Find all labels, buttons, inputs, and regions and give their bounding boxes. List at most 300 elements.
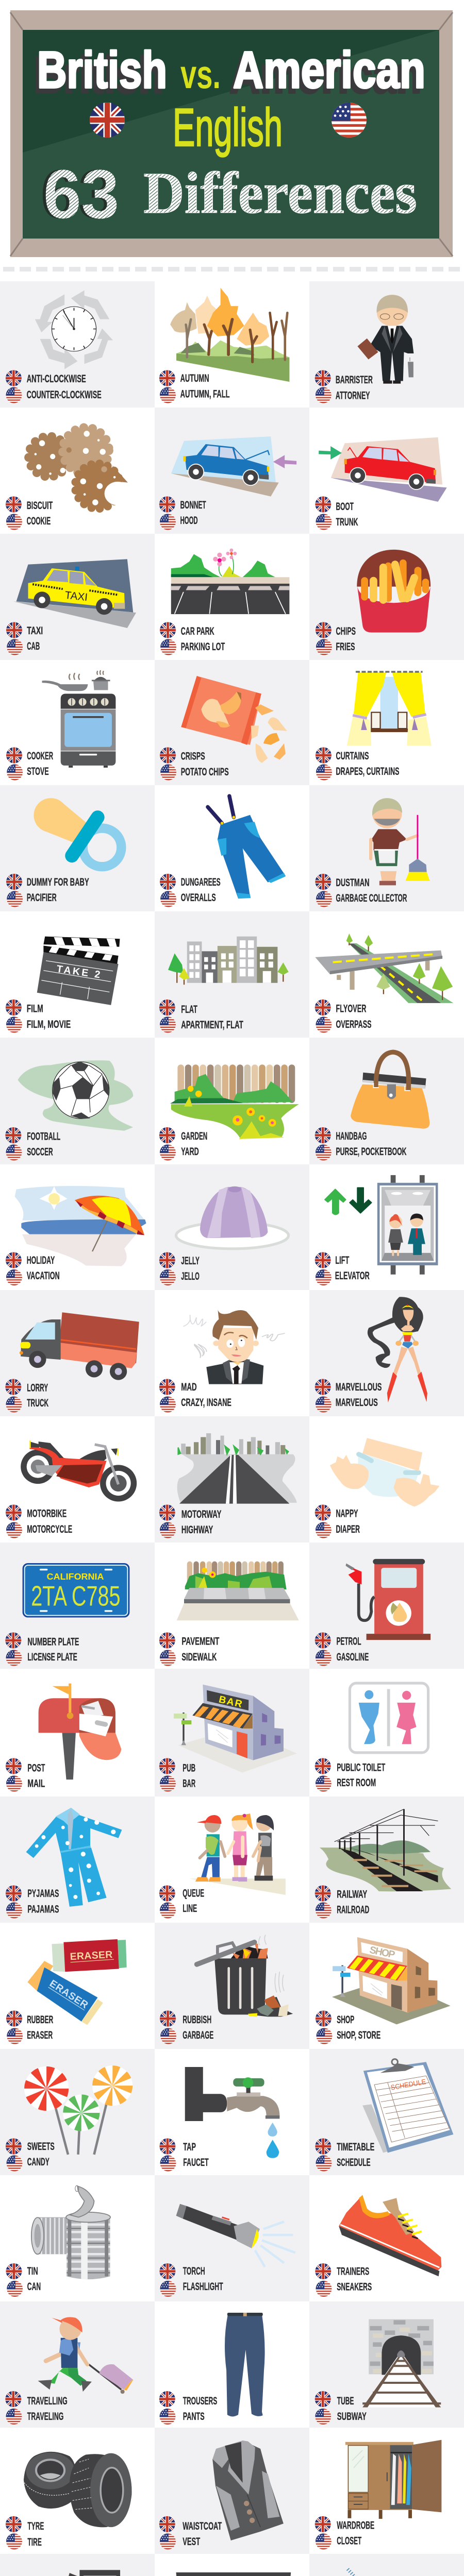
illustration: bag of crisps: [181, 676, 287, 763]
British term: BOOT: [336, 501, 354, 513]
panel: boot / trunk: [309, 408, 464, 534]
subtitle: 63: 63: [40, 156, 116, 233]
American term: REST ROOM: [337, 1777, 376, 1789]
American term: GARBAGE COLLECTOR: [336, 892, 407, 904]
British term: FOOTBALL: [27, 1131, 60, 1143]
panel: film / film, movie: [0, 911, 155, 1038]
UK flag: [159, 1504, 175, 1521]
panel: car park / parking lot: [155, 534, 309, 660]
panel: dungarees / overalls: [155, 785, 309, 911]
UK flag: [159, 2263, 175, 2279]
title: British vs. American: American: [229, 46, 422, 104]
US flag: [316, 639, 332, 655]
British term: CAR PARK: [181, 625, 214, 637]
US flag: [6, 1522, 22, 1538]
US flag: [160, 2534, 176, 2549]
UK flag: [6, 622, 22, 638]
panel: bonnet / hood: [155, 408, 309, 534]
panel: public toilet / rest room: [309, 1669, 464, 1797]
panel: autumn / autumn, fall: [155, 281, 309, 408]
illustration: yellow taxi: TAXI: [64, 589, 88, 603]
title: British vs. American: vs.: [180, 52, 221, 97]
illustration: lift with people and arrows: [325, 1175, 438, 1275]
UK flag: [315, 1504, 331, 1521]
American term: FLASHLIGHT: [183, 2281, 223, 2293]
US flag: [316, 514, 332, 530]
US flag: [316, 1396, 332, 1413]
American term: COUNTER-CLOCKWISE: [27, 389, 102, 401]
US flag: [7, 765, 23, 780]
panel: pyjamas / pajamas: [0, 1797, 155, 1923]
US flag: [316, 2156, 332, 2171]
illustration: football on grass patch: [18, 1060, 133, 1131]
American term: OVERPASS: [336, 1019, 371, 1030]
illustration: baby in nappy: [330, 1438, 439, 1506]
illustration: tyres: [24, 2452, 132, 2527]
US flag: [160, 514, 176, 530]
UK flag: [315, 2516, 331, 2532]
US flag: [6, 514, 22, 530]
British term: TIN: [27, 2265, 38, 2277]
UK flag: [159, 2138, 175, 2155]
American term: TIRE: [27, 2536, 42, 2548]
American term: CAB: [27, 640, 40, 652]
British term: PETROL: [337, 1635, 361, 1647]
American term: OVERALLS: [181, 892, 216, 904]
American term: CAN: [27, 2281, 41, 2293]
American term: PARKING LOT: [181, 641, 225, 653]
US flag: [316, 1017, 332, 1032]
US flag: [316, 387, 332, 403]
illustration: clock with circular arrows: [35, 291, 113, 369]
British term: MOTORWAY: [181, 1509, 221, 1520]
British term: TUBE: [337, 2395, 354, 2407]
UK flag: [315, 2138, 331, 2155]
panel: lift / elevator: [309, 1164, 464, 1290]
UK flag: [6, 1504, 22, 1521]
US flag: [160, 2028, 176, 2044]
American term: GARBAGE: [183, 2029, 213, 2041]
US flag: [316, 1775, 332, 1792]
British term: DUNGAREES: [181, 876, 221, 888]
British term: TAP: [183, 2141, 196, 2153]
American term: MAIL: [27, 1777, 45, 1790]
American term: DRAPES, CURTAINS: [336, 766, 399, 777]
panel: whisky / whisky/whiskey: [0, 2554, 155, 2576]
UK flag: [6, 1252, 22, 1268]
subtitle: 63: 63: [43, 156, 119, 233]
title: British vs. American: British: [34, 46, 163, 104]
UK flag: [159, 1252, 175, 1268]
UK flag: [5, 2391, 21, 2407]
British term: QUEUE: [183, 1887, 204, 1899]
title: British vs. American: American: [233, 41, 425, 99]
panel: trousers / pants: [155, 2301, 309, 2428]
American term: AUTUMN, FALL: [180, 388, 230, 400]
UK flag: [160, 747, 176, 764]
panel: zip / zipper: [309, 2554, 464, 2576]
UK flag: [315, 1127, 331, 1143]
UK flag: [159, 370, 175, 386]
British term: BISCUIT: [27, 500, 53, 512]
illustration: garden with fence and flowers: [170, 1064, 299, 1139]
illustration: whisky bottle and label: [37, 2570, 120, 2576]
American term: ERASER: [27, 2029, 53, 2041]
illustration: tunnel and tracks: [362, 2319, 441, 2408]
British term: TRAINERS: [337, 2266, 369, 2277]
UK flag: [6, 747, 22, 764]
US flag: [7, 891, 23, 907]
panel: railway / railroad: [309, 1797, 464, 1923]
British term: POST: [27, 1762, 45, 1774]
US flag: [6, 1775, 22, 1792]
UK flag: [315, 874, 331, 890]
panel: jelly / jello: [155, 1164, 309, 1290]
illustration: orange sneaker: [339, 2195, 441, 2276]
American term: PAJAMAS: [27, 1903, 59, 1915]
US flag: [316, 2281, 332, 2297]
illustration: beach with umbrella: [15, 1186, 146, 1266]
British term: LORRY: [27, 1382, 48, 1394]
panel: motorway / highway: [155, 1416, 309, 1543]
illustration: jelly on a plate: [176, 1187, 289, 1249]
US flag: [160, 1145, 176, 1160]
British term: AUTUMN: [180, 372, 209, 384]
British term: PUBLIC TOILET: [337, 1762, 385, 1773]
British term: RUBBISH: [183, 2014, 211, 2026]
British term: DUSTMAN: [336, 877, 369, 889]
UK flag: [5, 1379, 21, 1395]
panel: flyover / overpass: [309, 911, 464, 1038]
US flag: [6, 1017, 22, 1032]
US flag: [316, 1650, 332, 1666]
American term: YARD: [181, 1146, 199, 1158]
British term: TIMETABLE: [337, 2141, 374, 2153]
illustration: schedule clipboard: SCHEDULE: [390, 2078, 426, 2092]
illustration: cooker with pots: [42, 670, 115, 768]
panel: crisps / potato chips: [155, 660, 309, 785]
panel: biscuit / cookie: [0, 408, 155, 534]
American term: SUBWAY: [337, 2411, 367, 2422]
US flag: [332, 103, 367, 138]
US flag: [317, 2028, 332, 2044]
UK flag: [159, 999, 175, 1015]
panel: trainers / sneakers: [309, 2175, 464, 2301]
panel: number plate / license plate: [0, 1543, 155, 1669]
illustration: tin cans: [31, 2185, 110, 2279]
British term: MOTORBIKE: [27, 1507, 67, 1519]
British term: TRAVELLING: [27, 2395, 68, 2407]
US flag: [6, 1902, 22, 1919]
US flag: [6, 1396, 22, 1413]
American term: SNEAKERS: [337, 2281, 372, 2293]
UK flag: [315, 999, 331, 1015]
UK flag: [159, 1758, 175, 1774]
UK flag: [160, 874, 176, 890]
arrow pointing at the boot: [319, 446, 342, 460]
illustration: two erasers: [27, 1939, 127, 2025]
panel: dummy for baby / pacifier: [0, 785, 155, 911]
British term: BARRISTER: [336, 374, 373, 386]
subtitle: English: English: [173, 98, 283, 158]
British term: RUBBER: [27, 2014, 53, 2026]
illustration: film clapperboard: [37, 937, 120, 1005]
British term: BONNET: [180, 499, 206, 511]
UK flag: [6, 999, 22, 1015]
American term: FILM, MOVIE: [27, 1019, 71, 1030]
illustration: bar building: [174, 1685, 297, 1773]
US flag: [316, 2534, 332, 2549]
US flag: [316, 1522, 332, 1538]
UK flag: [315, 1886, 331, 1901]
American term: VEST: [183, 2536, 200, 2548]
illustration: rubbish bin: [197, 1935, 293, 2016]
UK flag: [6, 2516, 22, 2532]
illustration: toilet sign: [350, 1683, 428, 1753]
illustration: zip: [329, 2569, 443, 2576]
illustration: railway: [320, 1809, 451, 1891]
panel: post / mail: [0, 1669, 155, 1797]
UK flag: [159, 1127, 175, 1143]
American term: JELLO: [181, 1270, 200, 1282]
British term: TROUSERS: [183, 2395, 217, 2407]
British term: LIFT: [335, 1255, 349, 1266]
panel: flat / apartment, flat: [155, 911, 309, 1038]
US flag: [7, 2028, 23, 2044]
panel: holiday / vacation: [0, 1164, 155, 1290]
UK flag: [6, 2010, 22, 2027]
British term: FLAT: [181, 1004, 197, 1015]
panel: rubber / eraser: [0, 1923, 155, 2049]
illustration: window with yellow curtains: [347, 672, 432, 745]
US flag: [160, 2281, 176, 2297]
UK flag: [5, 1127, 21, 1143]
illustration: three children queuing: [189, 1814, 286, 1895]
British term: DUMMY FOR BABY: [27, 876, 89, 888]
illustration: waistcoat: [212, 2441, 284, 2540]
US flag: [316, 765, 332, 780]
British term: PYJAMAS: [27, 1888, 59, 1900]
British term: RAILWAY: [337, 1889, 367, 1901]
title: British vs. American: British: [37, 41, 167, 99]
UK flag: [6, 1886, 22, 1901]
UK flag: [159, 2516, 175, 2532]
panel: rubbish / garbage: [155, 1923, 309, 2049]
UK flag: [6, 2263, 22, 2279]
British term: GARDEN: [181, 1130, 207, 1142]
panel: cooker / stove: [0, 660, 155, 785]
American term: LINE: [183, 1903, 197, 1914]
illustration: orange handbag: [351, 1052, 429, 1129]
illustration: dustman with broom: [371, 798, 429, 885]
illustration: lollipops: [24, 2065, 132, 2155]
panel: mad / crazy, insane: [155, 1290, 309, 1416]
American term: FRIES: [336, 641, 355, 653]
American term: GASOLINE: [337, 1651, 369, 1663]
illustration: box of fries: [357, 550, 430, 633]
illustration: barrister man in suit: [357, 295, 413, 384]
British term: NAPPY: [336, 1507, 358, 1519]
US flag: [160, 1017, 176, 1032]
panel: marvellous / marvelous: [309, 1290, 464, 1416]
UK flag: [6, 1758, 22, 1774]
illustration: bar building: BAR: [218, 1694, 244, 1710]
American term: CLOSET: [337, 2535, 361, 2547]
UK flag: [316, 747, 332, 764]
American term: TRUCK: [27, 1397, 48, 1409]
British term: WAISTCOAT: [183, 2520, 222, 2532]
US flag: [160, 1650, 176, 1666]
illustration: apartment buildings: [168, 937, 289, 985]
American term: APARTMENT, FLAT: [181, 1019, 243, 1031]
US flag: [316, 891, 332, 907]
American term: ATTORNEY: [336, 389, 370, 402]
panel: petrol / gasoline: [309, 1543, 464, 1669]
US flag: [160, 639, 176, 655]
American term: VACATION: [27, 1270, 60, 1282]
British term: SWEETS: [27, 2141, 55, 2153]
illustration: trousers: [225, 2313, 265, 2416]
illustration: schedule clipboard: [362, 2059, 453, 2153]
panel: wardrobe / closet: [309, 2428, 464, 2554]
US flag: [160, 387, 176, 403]
panel: motorbike / motorcycle: [0, 1416, 155, 1543]
US flag: [316, 1902, 332, 1919]
panel: barrister / attorney: [309, 281, 464, 408]
illustration: pacifier: [34, 798, 121, 867]
British term: WARDROBE: [337, 2520, 374, 2532]
US flag: [160, 1902, 176, 1919]
American term: COOKIE: [27, 515, 51, 527]
American term: FAUCET: [183, 2157, 209, 2168]
UK flag: [160, 2010, 176, 2027]
American term: ELEVATOR: [335, 1270, 370, 1282]
illustration: blue pyjamas: [26, 1808, 122, 1907]
illustration: lorry: [20, 1312, 139, 1380]
illustration: cookies: [29, 428, 131, 509]
US flag: [6, 2156, 23, 2171]
panel: handbag / purse, pocketbook: [309, 1038, 464, 1164]
British term: JELLY: [181, 1255, 200, 1267]
US flag: [316, 1269, 332, 1285]
American term: MOTORCYCLE: [27, 1523, 72, 1535]
American term: SIDEWALK: [181, 1651, 217, 1663]
American term: MARVELOUS: [336, 1397, 378, 1409]
British term: MAD: [181, 1381, 197, 1393]
British term: HOLIDAY: [27, 1255, 55, 1266]
UK flag: [315, 370, 331, 386]
US flag: [160, 2409, 175, 2425]
British term: FILM: [27, 1003, 43, 1015]
US flag: [6, 1145, 22, 1160]
US flag: [6, 387, 22, 403]
UK flag: [159, 1886, 175, 1901]
British term: FLYOVER: [336, 1003, 366, 1015]
British term: COOKER: [27, 750, 53, 762]
American term: CRAZY, INSANE: [181, 1397, 231, 1409]
panel: sweets / candy: [0, 2049, 155, 2175]
UK flag: [315, 1758, 331, 1774]
American term: TRAVELING: [27, 2411, 63, 2422]
illustration: boy with suitcase: [38, 2317, 133, 2394]
illustration: California licence plate: 2TA C785: [31, 1580, 121, 1612]
illustration: pavement with fence: [177, 1561, 299, 1620]
British term: NUMBER PLATE: [27, 1636, 79, 1648]
illustration: California licence plate: CALIFORNIA: [47, 1571, 104, 1582]
American term: SHOP, STORE: [337, 2029, 380, 2041]
panel: shop / shop, store: [309, 1923, 464, 2049]
US flag: [6, 1650, 22, 1666]
illustration: superhero woman: [368, 1297, 427, 1402]
American term: TRUNK: [336, 516, 358, 528]
panel: waistcoat / vest: [155, 2428, 309, 2554]
illustration: flyover road: [315, 934, 453, 1003]
UK flag: [315, 1632, 331, 1649]
UK flag: [159, 1379, 175, 1395]
British term: MARVELLOUS: [336, 1381, 382, 1393]
panel: dustman / garbage collector: [309, 785, 464, 911]
illustration: film clapperboard: TAKE 2: [56, 963, 103, 981]
American term: SCHEDULE: [337, 2157, 371, 2168]
British term: SHOP: [337, 2014, 354, 2026]
UK flag: [316, 2010, 332, 2027]
US flag: [7, 2281, 23, 2297]
British term: PAVEMENT: [181, 1635, 220, 1647]
British term: HANDBAG: [336, 1130, 367, 1142]
British term: ANTI-CLOCKWISE: [27, 373, 86, 385]
panel: tin / can: [0, 2175, 155, 2301]
American term: STOVE: [27, 766, 49, 777]
panel: tap / faucet: [155, 2049, 309, 2175]
panel: travelling / traveling: [0, 2301, 155, 2428]
US flag: [160, 765, 176, 780]
American term: POTATO CHIPS: [181, 766, 229, 778]
panel: football / soccer: [0, 1038, 155, 1164]
illustration: motorway towards city: [177, 1433, 297, 1504]
American term: PURSE, POCKETBOOK: [336, 1146, 406, 1158]
British term: TORCH: [183, 2265, 205, 2277]
illustration: yellow taxi: [13, 559, 136, 628]
US flag: [160, 891, 176, 907]
subtitle: Differences: Differences: [143, 160, 417, 226]
American term: SOCCER: [27, 1146, 53, 1158]
US flag: [160, 1396, 176, 1413]
illustration: shop building: [332, 1937, 451, 2024]
US flag: [160, 1775, 176, 1792]
illustration: confused man in suit: [183, 1310, 285, 1384]
illustration: wardrobe: [345, 2440, 441, 2519]
British term: CRISPS: [181, 750, 205, 762]
UK flag: [160, 622, 176, 638]
illustration: car park with bushes and flowers: [171, 549, 289, 614]
panel: tyre / tire: [0, 2428, 155, 2554]
US flag: [7, 639, 23, 655]
illustration: petrol pump: [345, 1559, 430, 1640]
US flag: [315, 2409, 331, 2425]
American term: HIGHWAY: [181, 1524, 213, 1536]
UK flag: [159, 1632, 175, 1649]
UK flag: [6, 370, 22, 386]
illustration: two erasers: ERASER: [70, 1949, 114, 1962]
illustration: torch with light rays: [176, 2204, 295, 2267]
panel: queue / line: [155, 1797, 309, 1923]
illustration: dripping tap: [185, 2067, 279, 2158]
UK flag: [316, 622, 332, 638]
chalkboard title panel: [10, 10, 453, 257]
arrow pointing at the bonnet: [273, 455, 296, 468]
US flag: [6, 2534, 22, 2549]
American term: CANDY: [27, 2156, 49, 2168]
